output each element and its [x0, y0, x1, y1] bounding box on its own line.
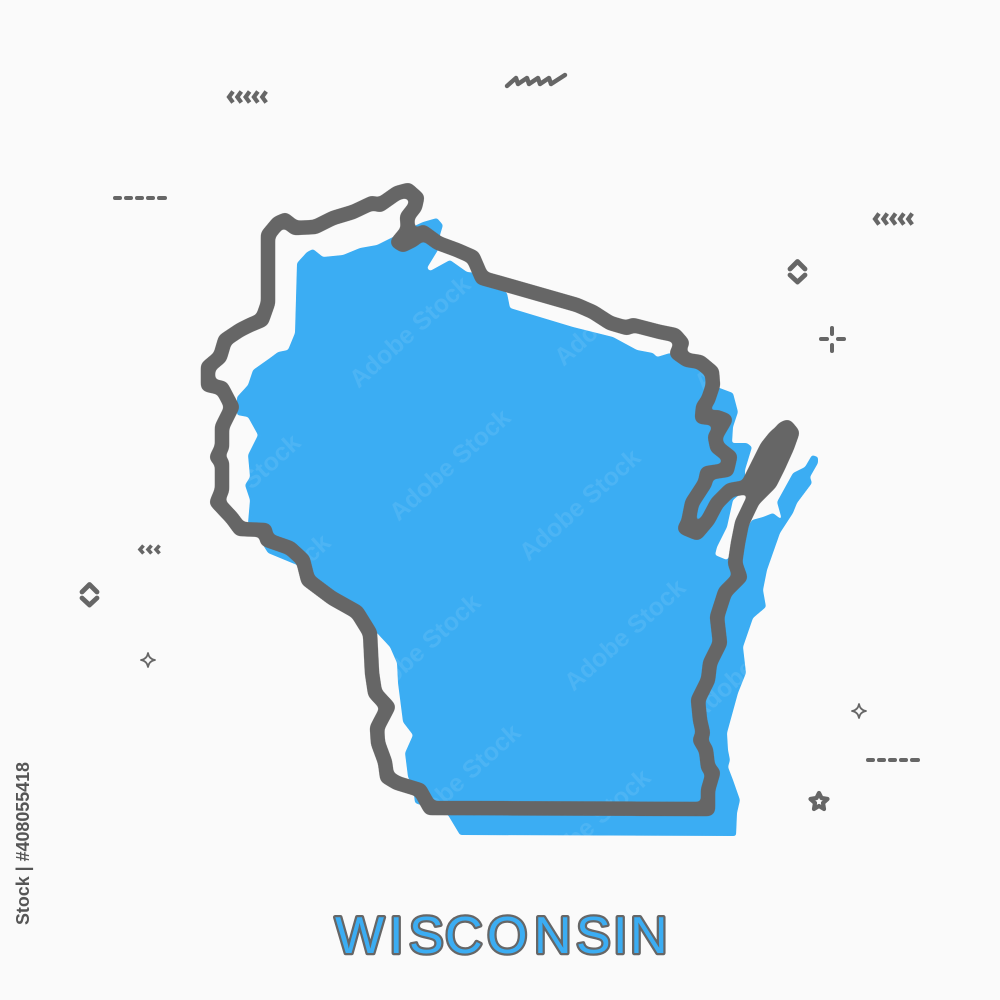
watermark: repeated Adobe Stock text: Adobe Stock — [19, 593, 151, 717]
icon: double chevron right — [790, 262, 805, 282]
blue map fill: Wisconsin silhouette — [237, 218, 818, 836]
watermark: repeated Adobe Stock text: Adobe Stock — [504, 110, 636, 234]
icon: sparkle right — [852, 704, 866, 718]
watermark: repeated Adobe Stock text: Adobe Stock — [734, 738, 866, 862]
watermark: repeated Adobe Stock text: Adobe Stock — [709, 78, 841, 202]
icon: sparkle left — [141, 653, 155, 667]
watermark: repeated Adobe Stock text: Adobe Stock — [844, 428, 976, 552]
icon: double chevron left — [82, 584, 97, 605]
watermark: repeated Adobe Stock text: Adobe Stock — [174, 428, 306, 552]
watermark: repeated Adobe Stock text: Adobe Stock — [54, 393, 186, 517]
watermark: repeated Adobe Stock text: Adobe Stock — [171, 103, 303, 227]
icon: chevrons top left — [229, 92, 266, 102]
watermark: repeated Adobe Stock text: Adobe Stock — [344, 270, 476, 394]
icon: chevrons top right — [875, 214, 912, 224]
watermark: repeated Adobe Stock text: Adobe Stock — [554, 863, 686, 987]
watermark: repeated Adobe Stock text: Adobe Stock — [384, 403, 516, 527]
watermark: repeated Adobe Stock text: Adobe Stock — [854, 788, 986, 912]
icon: dashed line right — [868, 758, 918, 762]
watermark: repeated Adobe Stock text: Adobe Stock — [9, 263, 141, 387]
watermark: repeated Adobe Stock text: Adobe Stock — [354, 588, 486, 712]
title: WISCONSIN: WISCONSIN — [335, 907, 668, 965]
watermark: repeated Adobe Stock text: Adobe Stock — [394, 718, 526, 842]
icon: dashed line top left — [115, 196, 165, 200]
watermark: repeated Adobe Stock text: Adobe Stock — [832, 121, 964, 245]
icon: chevrons left small — [140, 546, 160, 554]
watermark: repeated Adobe Stock text: Adobe Stock — [549, 248, 681, 372]
stock id text, vertical: Stock | #408055418 — [13, 762, 33, 925]
watermark: repeated Adobe Stock text: Adobe Stock — [684, 603, 816, 727]
watermark: repeated Adobe Stock text: Adobe Stock — [524, 763, 656, 887]
icon: wave top center — [507, 75, 565, 86]
icon: crosshair plus — [821, 328, 844, 351]
watermark: repeated Adobe Stock text: Adobe Stock — [59, 723, 191, 847]
watermark: repeated Adobe Stock text: Adobe Stock — [514, 443, 646, 567]
watermark: repeated Adobe Stock text: Adobe Stock — [379, 66, 511, 190]
gray map outline offset from the fill — [208, 190, 792, 809]
watermark: repeated Adobe Stock text: Adobe Stock — [44, 60, 176, 184]
watermark: repeated Adobe Stock text: Adobe Stock — [559, 573, 691, 697]
watermark: repeated Adobe Stock text: Adobe Stock — [204, 528, 336, 652]
watermark: repeated Adobe Stock text: Adobe Stock — [189, 768, 321, 892]
watermark: repeated Adobe Stock text: Adobe Stock — [689, 273, 821, 397]
icon: star — [810, 793, 828, 809]
